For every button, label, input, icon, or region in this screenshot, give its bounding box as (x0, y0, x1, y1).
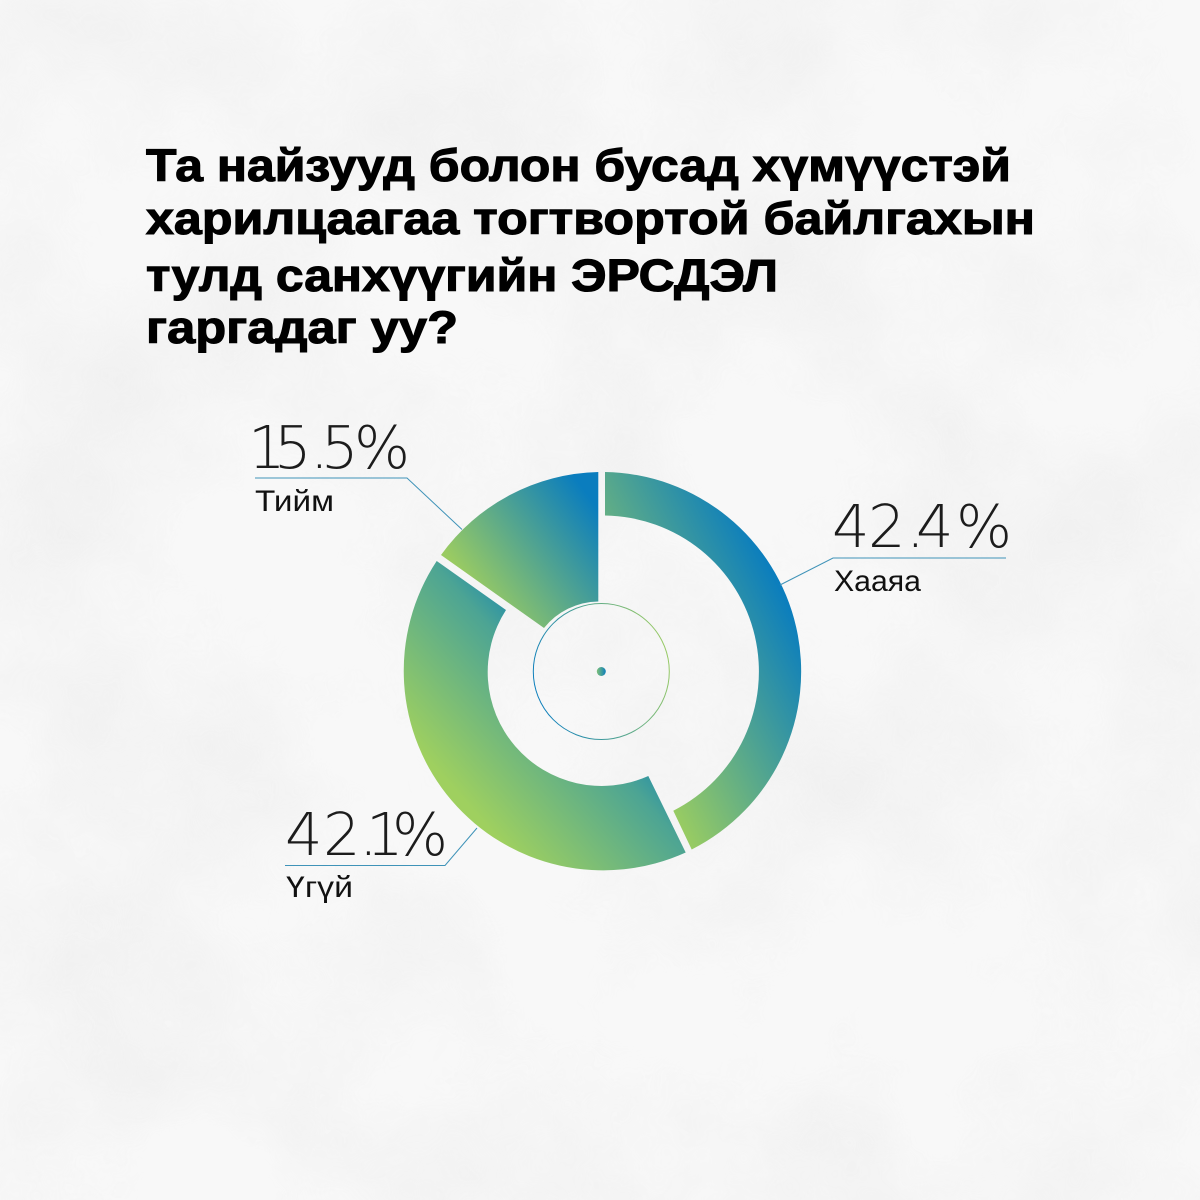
segment: Үгүй 42.1% (404, 561, 686, 870)
category: Хааяа: Хааяа (834, 565, 922, 598)
title: гаргадаг уу? (146, 302, 458, 353)
label: Хааяа 42.4% (780, 492, 1012, 598)
inner ring (533, 604, 669, 740)
leader line (780, 558, 1006, 585)
segment: Тийм 15.5% (441, 472, 598, 628)
category: Тийм: Тийм (255, 485, 334, 518)
category: Үгүй: Үгүй (286, 871, 353, 904)
donut chart (404, 472, 801, 870)
segment: Хааяа 42.4% (605, 472, 801, 850)
label: Үгүй 42.1% (285, 800, 477, 904)
label: Тийм 15.5% (248, 413, 462, 530)
title (146, 140, 1035, 353)
value: 42.1%: 42.1% (285, 800, 448, 869)
value: 15.5%: 15.5% (248, 413, 410, 482)
leader line (285, 828, 477, 866)
leader line (255, 478, 462, 530)
center dot (597, 667, 606, 676)
title: Та найзууд болон бусад хүмүүстэй (146, 140, 1011, 191)
value: 42.4%: 42.4% (832, 492, 1012, 561)
title: тулд санхүүгийн ЭРСДЭЛ (146, 250, 778, 301)
title: харилцаагаа тогтвортой байлгахын (146, 193, 1035, 244)
